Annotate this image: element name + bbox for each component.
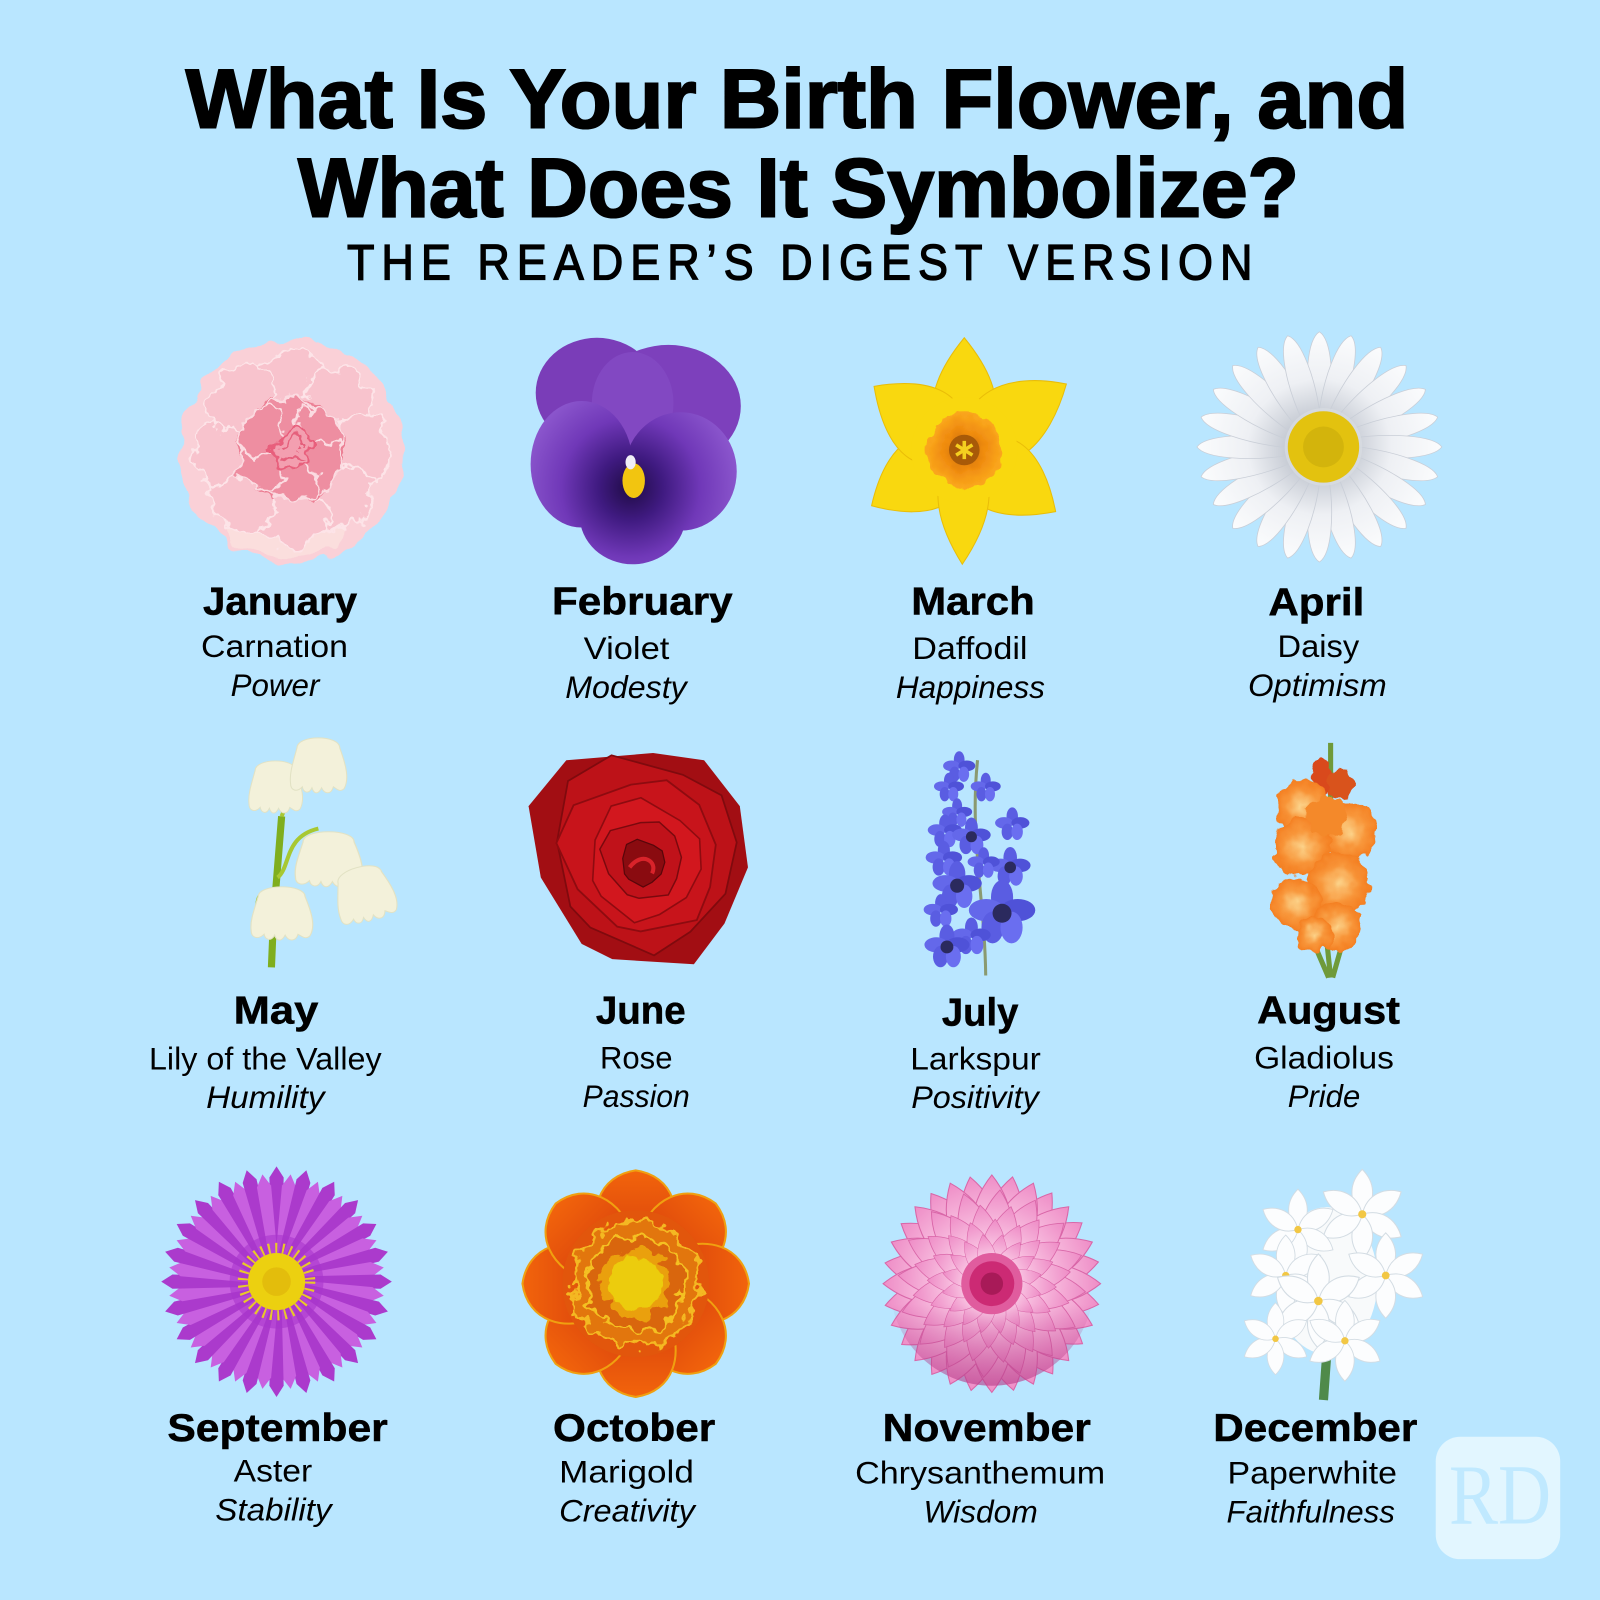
flower name: Lily of the Valley <box>149 1040 382 1076</box>
panel: June <box>522 739 759 1114</box>
icon: marigold <box>522 1170 749 1397</box>
symbolism: Happiness <box>896 669 1045 705</box>
icon: carnation <box>180 339 404 563</box>
title: What Is Your Birth Flower, and <box>186 52 1408 146</box>
month label: September <box>167 1407 388 1450</box>
flower name: Gladiolus <box>1254 1039 1394 1075</box>
symbolism: Humility <box>206 1079 327 1115</box>
symbolism: Wisdom <box>923 1493 1038 1529</box>
flower name: Daisy <box>1278 628 1359 664</box>
icon: chrysanthemum <box>864 1156 1119 1411</box>
panel: March <box>852 338 1086 705</box>
title <box>186 52 1408 234</box>
daisy centre <box>1285 408 1362 486</box>
month label: April <box>1268 581 1364 624</box>
month label: May <box>234 989 319 1032</box>
icon: paperwhite <box>1240 1169 1428 1400</box>
month label: July <box>942 992 1019 1035</box>
icon: daffodil <box>852 338 1086 565</box>
icon: lily of the valley <box>249 738 400 967</box>
panel: April <box>1166 312 1473 703</box>
symbolism: Faithfulness <box>1227 1493 1395 1529</box>
panel: September <box>144 1150 409 1527</box>
icon: aster <box>144 1150 409 1414</box>
symbolism: Pride <box>1288 1078 1360 1114</box>
panel: February <box>531 338 741 705</box>
icon: daisy <box>1166 312 1473 582</box>
panel: July <box>910 751 1041 1115</box>
panel: January <box>180 339 404 703</box>
flower name: Violet <box>584 630 670 666</box>
flower name: Marigold <box>559 1454 694 1490</box>
panel: November <box>855 1156 1119 1529</box>
month label: January <box>203 580 358 623</box>
panel: August <box>1254 743 1400 1114</box>
flower name: Daffodil <box>912 630 1028 666</box>
panel: December <box>1213 1169 1428 1529</box>
flower name: Chrysanthemum <box>855 1455 1105 1491</box>
symbolism: Creativity <box>559 1492 697 1528</box>
subtitle: THE READER’S DIGEST VERSION <box>347 235 1252 291</box>
flower name: Aster <box>234 1453 312 1489</box>
symbolism: Passion <box>583 1078 690 1114</box>
icon: violet <box>531 338 741 564</box>
month label: June <box>596 989 686 1032</box>
month label: November <box>883 1407 1091 1450</box>
month label: December <box>1213 1407 1417 1450</box>
flower name: Larkspur <box>910 1040 1041 1076</box>
panel: October <box>522 1170 749 1528</box>
month label: August <box>1257 989 1400 1032</box>
symbolism: Positivity <box>911 1079 1041 1115</box>
month label: October <box>553 1407 715 1450</box>
month label: February <box>552 580 733 623</box>
title: What Does It Symbolize? <box>298 140 1299 234</box>
symbolism: Modesty <box>565 669 689 705</box>
flower name: Carnation <box>201 628 348 664</box>
flower name: Paperwhite <box>1228 1455 1397 1491</box>
symbolism: Power <box>231 667 321 703</box>
icon: larkspur <box>924 751 1035 976</box>
logo: RD <box>1436 1437 1560 1559</box>
icon: gladiolus <box>1270 743 1378 978</box>
symbolism: Stability <box>215 1491 334 1527</box>
icon: rose <box>522 739 759 971</box>
panel: May <box>149 738 400 1115</box>
symbolism: Optimism <box>1248 667 1387 703</box>
month label: March <box>911 580 1035 623</box>
logo: RD: RD <box>1449 1447 1551 1542</box>
flower name: Rose <box>600 1039 672 1075</box>
